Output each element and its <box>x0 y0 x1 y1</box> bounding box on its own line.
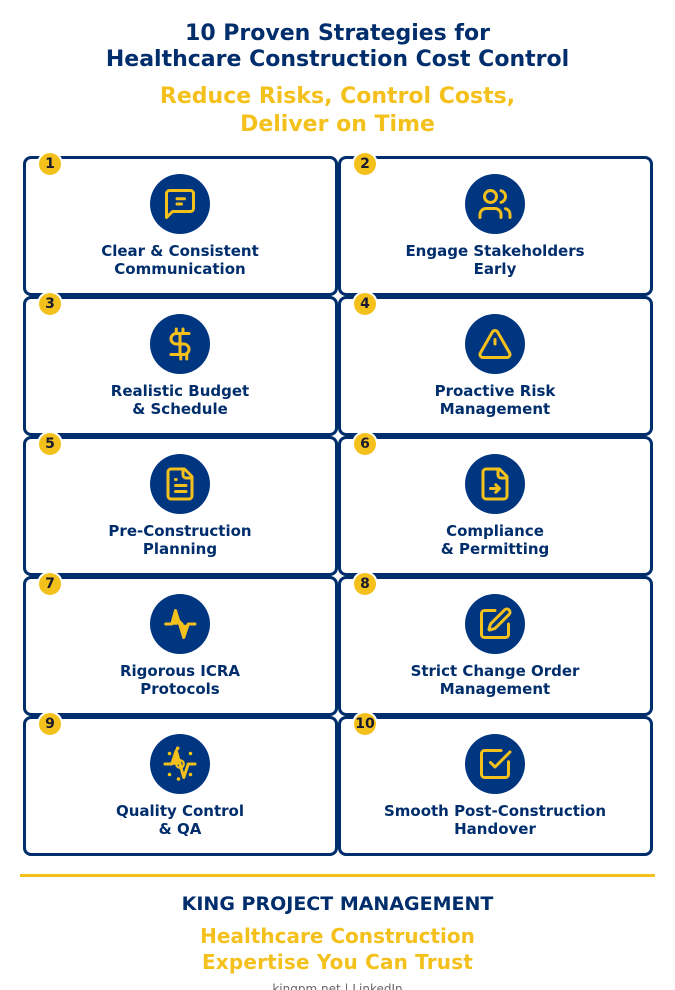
badge 4 <box>354 293 376 315</box>
panel: strategy 4 <box>338 296 653 436</box>
label 10 <box>384 802 606 838</box>
label 1 <box>101 242 259 278</box>
icon: users <box>465 174 525 234</box>
badge 5: 5 <box>45 436 55 452</box>
label 8: Management <box>440 680 550 698</box>
label 6: & Permitting <box>441 540 549 558</box>
label 4 <box>435 382 556 418</box>
badge 8: 8 <box>360 576 370 592</box>
badge 7: 7 <box>45 576 55 592</box>
label 1: Communication <box>114 260 246 278</box>
badge 2 <box>354 153 376 175</box>
label 6: Compliance <box>446 522 544 540</box>
label 8 <box>411 662 580 698</box>
badge 9: 9 <box>45 716 55 732</box>
panel: strategy 6 <box>338 436 653 576</box>
label 7: Rigorous ICRA <box>120 662 240 680</box>
label 6 <box>441 522 549 558</box>
label 7 <box>120 662 240 698</box>
icon: sparkle pulse <box>150 734 210 794</box>
badge 10 <box>354 713 376 735</box>
badge 10: 10 <box>355 716 375 732</box>
label 5: Pre-Construction <box>108 522 252 540</box>
label 5: Planning <box>143 540 217 558</box>
label 4: Management <box>440 400 550 418</box>
title: 10 Proven Strategies for <box>185 21 490 46</box>
icon: warning triangle <box>465 314 525 374</box>
badge 6 <box>354 433 376 455</box>
panel: strategy 5 <box>23 436 338 576</box>
badge 3 <box>39 293 61 315</box>
label 9: Quality Control <box>116 802 244 820</box>
panel: strategy 10 <box>338 716 653 856</box>
label 10: Handover <box>454 820 536 838</box>
badge 1: 1 <box>45 156 55 172</box>
subtitle: Reduce Risks, Control Costs, <box>160 84 515 109</box>
label 2: Early <box>474 260 516 278</box>
label 8: Strict Change Order <box>411 662 579 680</box>
label 3: & Schedule <box>132 400 228 418</box>
badge 1 <box>39 153 61 175</box>
panel: strategy 2 <box>338 156 653 296</box>
label 9: & QA <box>159 820 201 838</box>
label 3: Realistic Budget <box>111 382 249 400</box>
panel: strategy 8 <box>338 576 653 716</box>
label 4: Proactive Risk <box>435 382 555 400</box>
icon: dollar <box>150 314 210 374</box>
footer: tagline: Expertise You Can Trust <box>202 950 473 974</box>
panel: strategy 3 <box>23 296 338 436</box>
badge 6: 6 <box>360 436 370 452</box>
subtitle <box>160 84 515 137</box>
panel: strategy 9 <box>23 716 338 856</box>
footer rule <box>20 874 655 877</box>
icon: document arrow <box>465 454 525 514</box>
footer: tagline <box>200 924 475 974</box>
label 1: Clear & Consistent <box>101 242 259 260</box>
footer: tagline: Healthcare Construction <box>200 924 475 948</box>
badge 9 <box>39 713 61 735</box>
badge 3: 3 <box>45 296 55 312</box>
badge 2: 2 <box>360 156 370 172</box>
panel: strategy 7 <box>23 576 338 716</box>
icon: pulse <box>150 594 210 654</box>
badge 5 <box>39 433 61 455</box>
label 7: Protocols <box>140 680 220 698</box>
label 9 <box>116 802 244 838</box>
label 2 <box>405 242 585 278</box>
label 2: Engage Stakeholders <box>405 242 585 260</box>
icon: checkbox <box>465 734 525 794</box>
panel: strategy 1 <box>23 156 338 296</box>
footer: company name: KING PROJECT MANAGEMENT <box>182 893 493 915</box>
icon: document <box>150 454 210 514</box>
label 3 <box>111 382 249 418</box>
title <box>106 21 569 72</box>
title: Healthcare Construction Cost Control <box>106 47 569 72</box>
label 5 <box>108 522 252 558</box>
icon: pen in square <box>465 594 525 654</box>
badge 7 <box>39 573 61 595</box>
badge 8 <box>354 573 376 595</box>
label 10: Smooth Post-Construction <box>384 802 606 820</box>
badge 4: 4 <box>360 296 370 312</box>
icon: message <box>150 174 210 234</box>
subtitle: Deliver on Time <box>240 112 435 137</box>
